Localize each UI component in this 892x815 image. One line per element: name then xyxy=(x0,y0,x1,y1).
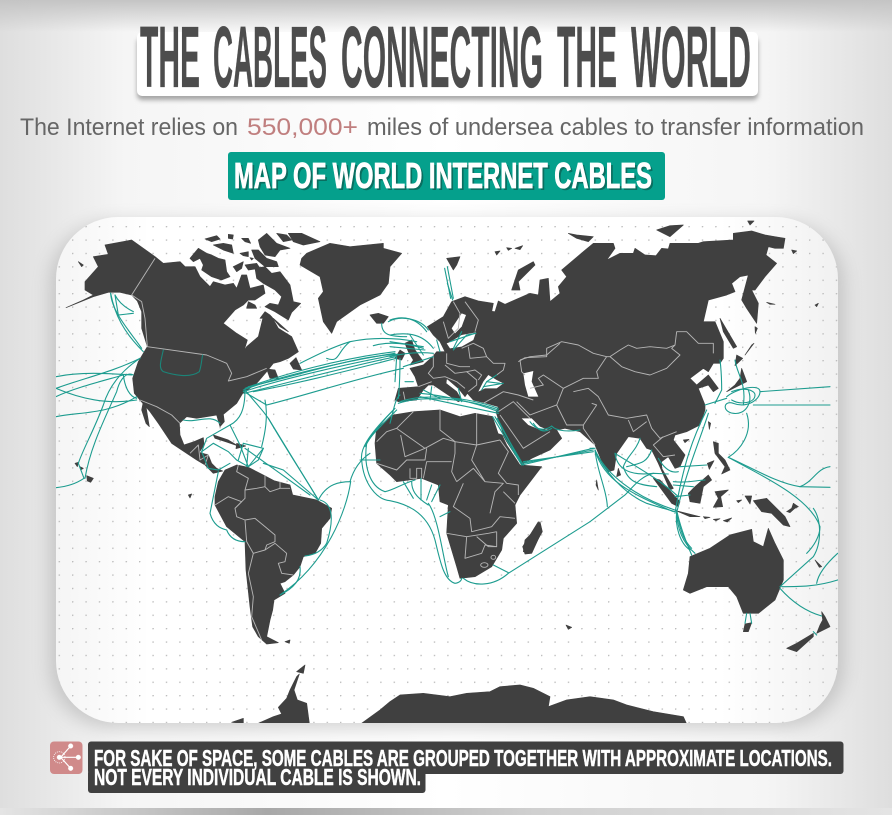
landmass: Australia and New Zealand xyxy=(523,503,830,652)
title banner: CABLES xyxy=(213,9,327,106)
landmass: British Isles xyxy=(395,340,423,365)
cables: Europe and Mediterranean xyxy=(390,283,503,423)
country borders: Africa xyxy=(377,410,518,567)
section heading: map of world internet cables xyxy=(228,152,665,200)
subtitle: 550,000+ xyxy=(247,114,358,141)
cables: Pacific to North America xyxy=(56,293,203,488)
section heading: map of world internet cables: MAP OF WORLD INTERNET CABLES xyxy=(236,157,654,198)
country borders: Asia xyxy=(498,332,713,457)
title banner: THE xyxy=(140,9,200,106)
landmass: Canadian Arctic islands xyxy=(190,233,320,320)
note: grouped cables disclaimer: NOT EVERY INDIVIDUAL CABLE IS SHOWN. xyxy=(94,764,421,790)
landmass: Greenland and Iceland xyxy=(300,243,402,333)
title banner: THE xyxy=(557,9,617,106)
landmass: Eurasia xyxy=(395,231,785,490)
cables: Caribbean and South America xyxy=(183,390,370,595)
landmass: Antarctica xyxy=(232,665,687,724)
icon: network share xyxy=(50,742,82,774)
country borders: Americas xyxy=(132,258,267,465)
landmass: North America xyxy=(66,240,302,482)
inland seas xyxy=(447,313,548,435)
note: grouped cables disclaimer xyxy=(88,742,844,793)
cables: transatlantic bundle xyxy=(243,267,453,405)
landmass: Asia Pacific islands xyxy=(596,422,797,527)
country borders: South America xyxy=(215,465,293,640)
cables: Africa coast xyxy=(360,408,593,584)
cables: Australia and New Zealand xyxy=(677,508,838,635)
cables: Asia Pacific xyxy=(590,360,830,553)
subtitle: miles of undersea cables to transfer information xyxy=(367,114,864,141)
section heading: map of world internet cables: MAP OF WORLD INTERNET CABLES xyxy=(234,155,652,196)
country borders: Europe xyxy=(403,302,560,403)
title banner xyxy=(137,9,758,106)
subtitle: The Internet relies on xyxy=(20,114,238,141)
panel: world map xyxy=(50,217,844,728)
subtitle xyxy=(20,114,864,141)
landmass: Japan and Russian far east islands xyxy=(447,221,818,392)
landmass: Africa xyxy=(375,410,542,578)
landmass: South America and Caribbean xyxy=(188,435,332,644)
